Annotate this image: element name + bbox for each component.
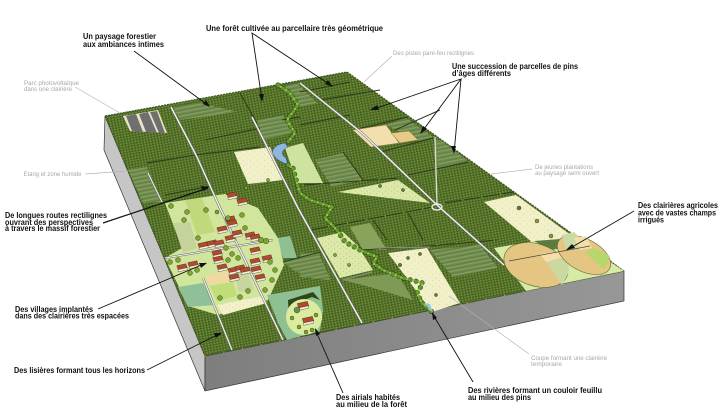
label: lisières — [14, 333, 222, 375]
airial clearing — [267, 286, 323, 340]
label: longues routes — [5, 186, 209, 233]
label: airials — [315, 328, 407, 409]
label: un paysage forestier: aux ambiances intimes — [83, 40, 164, 49]
irrigated agricultural clearing — [494, 227, 624, 295]
label: rivières — [432, 312, 602, 402]
block left side — [104, 116, 205, 391]
village clearing — [165, 194, 284, 315]
label: une forêt cultivée — [206, 24, 383, 102]
label: parc photovoltaïque — [24, 80, 120, 113]
label: jeunes plantations — [491, 164, 599, 177]
label: étang — [24, 171, 128, 178]
label: airials: Des airials habités — [336, 393, 400, 402]
block: terrain model — [104, 72, 624, 391]
label: villages: dans des clairières très espacées — [15, 312, 129, 320]
roads — [148, 83, 504, 350]
label: succession de parcelles: Une succession de parcelles de pins — [452, 62, 578, 71]
label: villages — [15, 263, 207, 320]
forest base — [105, 72, 624, 356]
block front side — [205, 271, 624, 391]
label: lisières: Des lisières formant tous les horizons — [14, 366, 145, 375]
label: airials: au milieu de la forêt — [336, 400, 407, 409]
label: un paysage forestier — [83, 32, 210, 107]
label: succession de parcelles: d’âges différents — [452, 69, 511, 78]
label: étang: Etang et zone humide — [24, 171, 82, 178]
village and field trees — [168, 178, 553, 300]
label: pistes pare-feu — [364, 50, 475, 82]
label: pistes pare-feu: Des pistes pare-feu rectilignes — [393, 50, 475, 57]
label: coupe — [449, 296, 607, 368]
label: coupe: Coupe formant une clairière — [531, 355, 607, 362]
label: un paysage forestier: Un paysage forestier — [83, 32, 157, 41]
label: jeunes plantations: De jeunes plantations — [535, 164, 594, 171]
hedgerows — [147, 82, 514, 262]
clearings — [234, 143, 575, 312]
label: rivières: Des rivières formant un couloir feuillu — [468, 386, 602, 395]
photovoltaic park — [123, 110, 167, 133]
label: longues routes: à travers le massif forestier — [5, 224, 101, 233]
label: longues routes: De longues routes rectilignes — [5, 211, 107, 220]
label: coupe: temporaire — [531, 361, 562, 368]
label: clairières agricoles: irrigués — [638, 216, 664, 224]
label: longues routes: ouvrant des perspectives — [5, 218, 93, 227]
river with riparian trees — [278, 85, 433, 313]
label: jeunes plantations: au paysage semi ouvert — [535, 170, 599, 177]
village houses — [177, 192, 272, 282]
label: une forêt cultivée: Une forêt cultivée au parcellaire très géométrique — [206, 24, 383, 33]
young plantation parcels — [128, 83, 498, 300]
label: villages: Des villages implantés — [15, 305, 93, 314]
label: clairières agricoles — [566, 201, 718, 250]
label: rivières: au milieu des pins — [468, 393, 531, 402]
roundabout — [432, 204, 442, 210]
sand parcels — [353, 125, 418, 147]
label: parc photovoltaïque: dans une clairière — [24, 86, 72, 93]
label: succession de parcelles — [370, 62, 578, 154]
label: parc photovoltaïque: Parc photovoltaïque — [24, 80, 79, 87]
hedgerow edge trees — [205, 178, 624, 356]
pond — [273, 143, 288, 165]
